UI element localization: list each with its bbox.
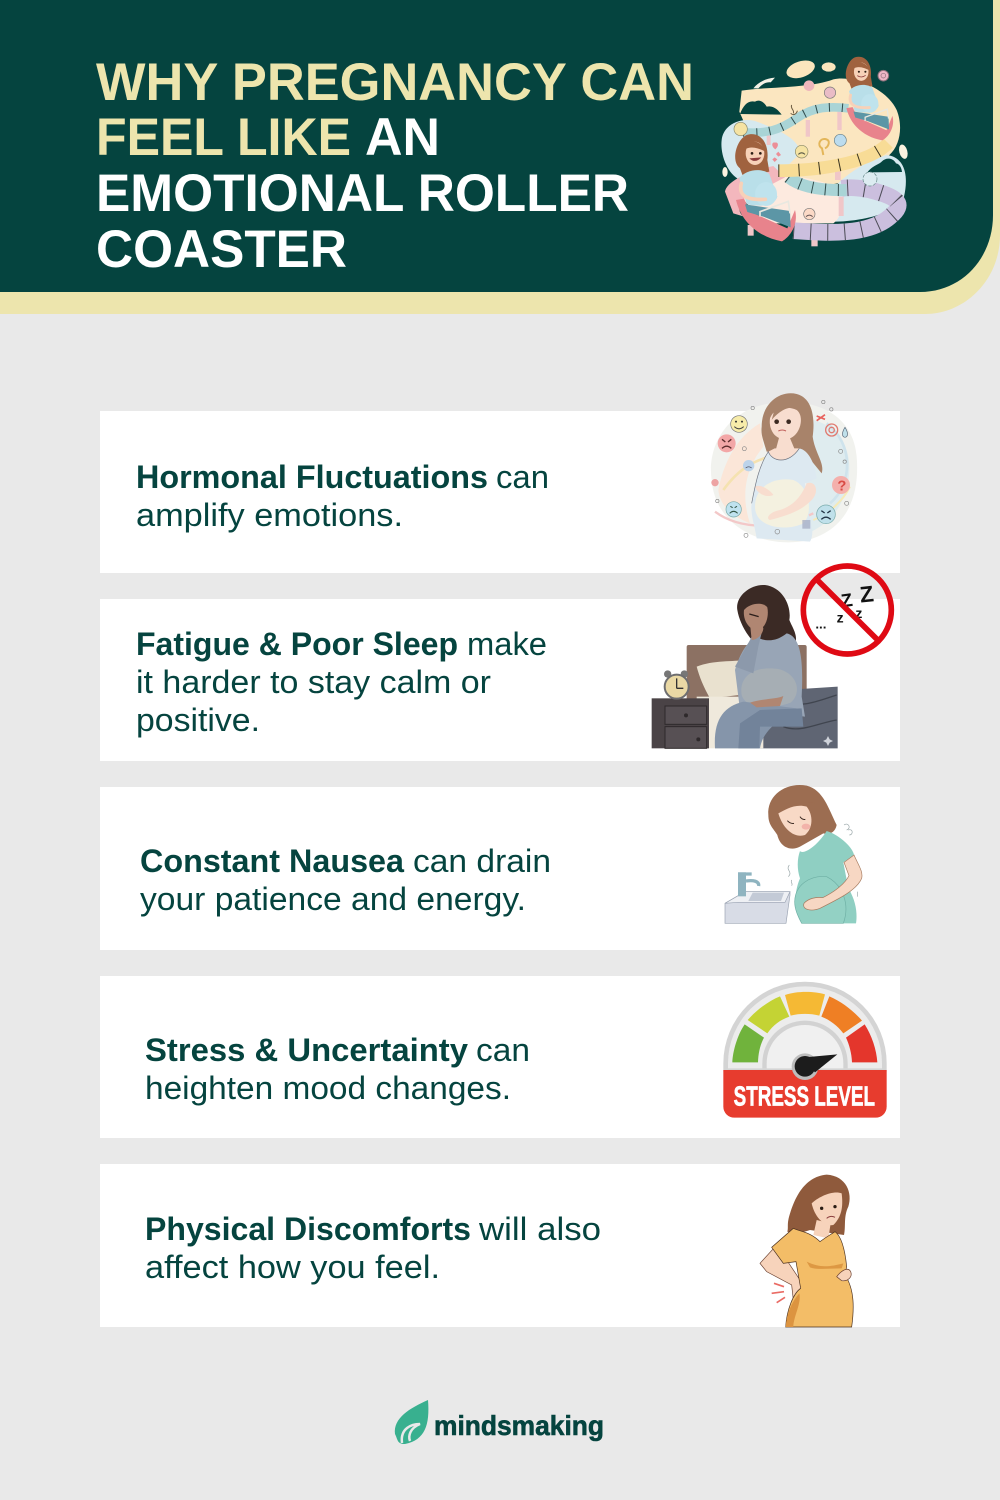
illustration: woman with swirling emotions: ? [837, 479, 846, 495]
text: fatigue and poor sleep: make [467, 626, 547, 662]
icon: no sleep sign: Z [840, 589, 854, 611]
text: physical discomforts: will also [478, 1211, 601, 1247]
icon: no sleep sign: ... [815, 617, 826, 632]
panel: stress and uncertainty [100, 976, 900, 1138]
title: WHY PREGNANCY CAN [96, 53, 694, 112]
nightstand [652, 698, 709, 748]
icon: no sleep sign: z [855, 605, 862, 621]
text: stress and uncertainty [145, 1032, 530, 1106]
hair [761, 393, 822, 473]
text: stress and uncertainty: heighten mood changes. [145, 1070, 511, 1106]
upper woman [846, 57, 893, 140]
illustration: woman with swirling emotions [711, 393, 857, 542]
illustration: tired woman on bed [652, 585, 838, 748]
face [770, 408, 801, 439]
logo: mindsmaking [395, 1400, 604, 1444]
emotion faces [731, 416, 747, 432]
text: hormonal fluctuations: can [496, 459, 549, 495]
text: constant nausea: can drain [413, 843, 551, 879]
text: physical discomforts: Physical Discomforts [145, 1211, 471, 1247]
woman [737, 585, 796, 645]
panel: hormonal fluctuations [100, 411, 900, 573]
icon: no sleep sign: z [837, 610, 844, 626]
text: fatigue and poor sleep: Fatigue & Poor Sleep [136, 626, 458, 662]
title: AN [365, 108, 440, 167]
panel: physical discomforts [100, 1164, 900, 1327]
woman [768, 785, 837, 849]
text: stress and uncertainty: Stress & Uncertainty [145, 1032, 468, 1068]
text: hormonal fluctuations: amplify emotions. [136, 497, 403, 533]
title: FEEL LIKE [96, 108, 351, 167]
segments [732, 1024, 764, 1062]
text: fatigue and poor sleep [136, 626, 547, 738]
title: EMOTIONAL ROLLER [96, 164, 629, 223]
text: constant nausea: your patience and energy. [140, 881, 526, 917]
illustration: nauseous woman at sink [725, 785, 862, 923]
icon: stress level gauge [723, 982, 887, 1118]
icon: stress level gauge: STRESS LEVEL [734, 1081, 875, 1112]
clouds [740, 101, 782, 115]
title: COASTER [96, 220, 347, 279]
dial [762, 1021, 848, 1068]
illustration: emotional roller coaster [721, 57, 909, 246]
text: physical discomforts [145, 1211, 601, 1285]
icon: leaf [395, 1400, 428, 1444]
panel: fatigue and poor sleep [100, 599, 900, 761]
lower woman [735, 134, 796, 241]
text: fatigue and poor sleep: it harder to stay calm or [136, 664, 491, 700]
icon: no sleep sign: Z [858, 580, 875, 608]
text: constant nausea [140, 843, 551, 917]
banner [723, 1070, 887, 1118]
text: hormonal fluctuations: Hormonal Fluctuations [136, 459, 488, 495]
body [751, 448, 817, 542]
illustration: woman with back pain [760, 1175, 853, 1327]
header banner [0, 0, 1000, 314]
emotion icons [734, 122, 747, 136]
supports [748, 112, 844, 246]
text: hormonal fluctuations [136, 459, 549, 533]
track [793, 188, 898, 232]
text: constant nausea: Constant Nausea [140, 843, 404, 879]
title [96, 53, 694, 279]
alarm clock [664, 670, 671, 678]
logo: mindsmaking: mindsmaking [434, 1410, 604, 1441]
icon: no sleep sign [803, 566, 891, 654]
text: fatigue and poor sleep: positive. [136, 702, 260, 738]
panel: constant nausea [100, 787, 900, 950]
sink [725, 892, 790, 923]
text: physical discomforts: affect how you feel. [145, 1249, 440, 1285]
text: stress and uncertainty: can [476, 1032, 530, 1068]
